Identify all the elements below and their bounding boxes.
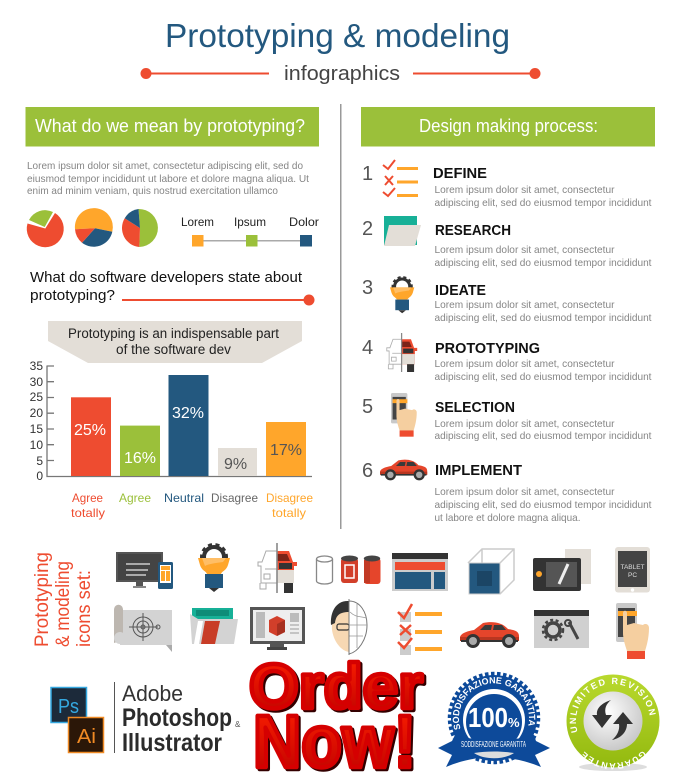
pie chart 1 — [27, 210, 64, 247]
icon: wire cube — [468, 549, 514, 594]
icon: tablet pc: PC — [628, 572, 637, 579]
satisfaction guarantee badge: SODDISFAZIONE GARANTITA — [452, 677, 536, 730]
step 2: research: RESEARCH — [435, 223, 511, 239]
step 4: prototyping: PROTOTYPING — [435, 341, 540, 357]
bar: disagree 9% — [218, 448, 257, 476]
category labels: totally — [272, 506, 306, 520]
category labels: totally — [71, 506, 105, 520]
y axis — [30, 359, 312, 483]
step 5: selection — [362, 393, 652, 442]
banner callout — [48, 321, 302, 363]
satisfaction guarantee badge: SODDISFAZIONE GARANTITA — [461, 740, 526, 749]
icon: textured cylinder — [341, 556, 358, 583]
step 5: selection: adipiscing elit, sed do eiusmod tempor incididunt — [434, 430, 652, 442]
bar: disagree totally 17%: 17% — [270, 442, 302, 459]
icon: checklist large — [398, 604, 442, 655]
pie legend: Ipsum — [234, 215, 266, 229]
category labels: Disagree — [266, 491, 313, 505]
step 6: implement: Lorem ipsum dolor sit amet, consectetur — [434, 486, 615, 498]
icon: graphics tablet — [533, 549, 591, 591]
icon: car — [380, 460, 427, 480]
y axis: 5 — [36, 454, 43, 468]
icon: phone touch large — [616, 603, 649, 659]
icon: light bulb large — [198, 544, 230, 592]
question heading: prototyping? — [30, 287, 115, 304]
step 5: selection: SELECTION — [435, 400, 515, 416]
icon: browser layout — [392, 553, 448, 591]
step 6: implement — [362, 460, 652, 524]
logos: photoshop and illustrator: Adobe — [122, 681, 183, 706]
category labels: Neutral — [164, 491, 204, 505]
icon: browser with tools — [534, 610, 589, 648]
step 5: selection: 5 — [362, 396, 373, 418]
intro text block: eiusmod tempor incididunt ut labore et dolore magna aliqua. Ut — [27, 173, 309, 185]
step 3: ideate: 3 — [362, 277, 373, 299]
icon: phone touch — [391, 393, 417, 437]
icon: photoshop: Ps — [58, 696, 79, 718]
icons set vertical label: Prototyping — [32, 552, 53, 647]
step 6: implement: 6 — [362, 460, 373, 482]
order now call to action: Order — [249, 652, 423, 722]
y axis: 15 — [30, 422, 43, 436]
intro text block — [27, 160, 309, 197]
icon: checklist — [383, 160, 418, 197]
icon: car large — [460, 622, 519, 648]
step 2: research: 2 — [362, 218, 373, 240]
icon: open folder — [190, 608, 238, 644]
category labels: Agree — [72, 491, 103, 505]
logos: photoshop and illustrator: & — [235, 720, 241, 729]
step 6: implement: IMPLEMENT — [435, 463, 522, 479]
icon: outline cylinder — [316, 556, 332, 584]
y axis: 10 — [30, 438, 43, 452]
order now call to action: Now! — [253, 700, 416, 783]
question heading — [30, 269, 314, 306]
category labels: Disagree — [211, 491, 258, 505]
step 4: prototyping: Lorem ipsum dolor sit amet, consectetur — [434, 358, 615, 370]
pie legend: Dolor — [289, 215, 319, 229]
icon: illustrator: Ai — [77, 726, 96, 748]
icon: illustrator — [68, 718, 104, 752]
icon: solid cylinder — [364, 556, 380, 584]
pie chart 3 — [122, 209, 158, 247]
panel: what do we mean by prototyping — [26, 107, 319, 520]
logos: photoshop and illustrator: Illustrator — [122, 729, 222, 757]
satisfaction guarantee badge: 100 — [468, 702, 508, 733]
step 1: define: Lorem ipsum dolor sit amet, consectetur — [434, 184, 615, 196]
unlimited revision badge: GUARANTEE — [582, 752, 646, 770]
icon: light bulb — [390, 277, 414, 313]
icons set vertical label — [32, 552, 95, 647]
step 3: ideate: adipiscing elit, sed do eiusmod tempor incididunt — [434, 312, 652, 324]
y axis: 25 — [30, 390, 43, 404]
step 3: ideate — [362, 277, 652, 324]
order now call to action — [249, 652, 423, 783]
unlimited revision badge — [566, 674, 660, 771]
step 1: define: 1 — [362, 163, 373, 185]
logos: photoshop and illustrator: Photoshop — [122, 704, 232, 732]
step 4: prototyping: 4 — [362, 337, 373, 359]
logos: photoshop and illustrator — [51, 681, 241, 757]
step 6: implement: ut labore et dolore magna aliqua. — [434, 512, 580, 524]
y axis: 35 — [30, 359, 43, 373]
icon: blueprint scroll — [114, 605, 172, 652]
icon: half wireframe car large — [258, 543, 297, 593]
icon: tablet pc: TABLET — [620, 564, 645, 571]
icon: monitor and phone — [116, 552, 173, 589]
question heading: What do software developers state about — [30, 269, 303, 286]
pie chart 2 — [75, 208, 113, 247]
step 3: ideate: IDEATE — [435, 283, 486, 299]
icon: tablet pc — [615, 547, 650, 592]
step 5: selection: Lorem ipsum dolor sit amet, consectetur — [434, 418, 615, 430]
icon: half wireframe car — [387, 333, 417, 372]
step 2: research: Lorem ipsum dolor sit amet, consectetur — [434, 244, 615, 256]
pie legend — [181, 215, 319, 246]
bar: disagree 9%: 9% — [224, 456, 247, 473]
bar: disagree totally 17% — [266, 422, 306, 476]
heading: left panel — [26, 107, 319, 146]
banner callout: of the software dev — [116, 342, 231, 357]
category labels — [71, 491, 313, 520]
heading: right panel: Design making process: — [419, 116, 598, 136]
panel: design making process — [361, 107, 655, 524]
step 4: prototyping: adipiscing elit, sed do eiusmod tempor incididunt — [434, 371, 652, 383]
icon: folder — [384, 216, 421, 246]
step 2: research — [362, 216, 652, 269]
bar chart — [30, 359, 313, 520]
bar: agree 16% — [120, 426, 160, 476]
category labels: Agree — [119, 491, 151, 505]
bar: neutral 32%: 32% — [172, 405, 204, 422]
heading: left panel: What do we mean by prototyping? — [35, 116, 305, 136]
step 1: define: adipiscing elit, sed do eiusmod tempor incididunt — [434, 197, 652, 209]
title: Prototyping & modeling — [165, 17, 510, 54]
intro text block: enim ad minim veniam, quis nostrud exercitation ullamco — [27, 185, 278, 197]
bar: agree 16%: 16% — [124, 450, 156, 467]
y axis: 30 — [30, 375, 43, 389]
unlimited revision badge: UNLIMITED REVISION — [570, 678, 656, 733]
bar: neutral 32% — [168, 375, 208, 476]
satisfaction guarantee badge: % — [508, 715, 520, 730]
y axis: 0 — [36, 469, 43, 483]
bar: agree totally 25%: 25% — [74, 422, 106, 439]
pie legend: Lorem — [181, 215, 214, 229]
icon: monitor with 3D cube — [250, 607, 305, 650]
bar: agree totally 25% — [71, 397, 111, 476]
intro text block: Lorem ipsum dolor sit amet, consectetur adipiscing elit, sed do — [27, 160, 303, 172]
icons set vertical label: icons set: — [74, 570, 95, 647]
subtitle with side rules: infographics — [284, 63, 400, 85]
heading: right panel — [361, 107, 655, 146]
step 1: define: DEFINE — [433, 166, 487, 182]
banner callout: Prototyping is an indispensable part — [68, 326, 279, 341]
step 6: implement: adipiscing elit, sed do eiusmod tempor incididunt — [434, 499, 652, 511]
y axis: 20 — [30, 406, 43, 420]
step 1: define — [362, 160, 652, 209]
step 2: research: adipiscing elit, sed do eiusmod tempor incididunt — [434, 257, 652, 269]
icon: photoshop — [51, 688, 86, 722]
icon: half wireframe face — [331, 599, 367, 655]
step 3: ideate: Lorem ipsum dolor sit amet, consectetur — [434, 299, 615, 311]
icons set vertical label: & modeling — [53, 561, 74, 647]
subtitle with side rules — [140, 63, 540, 85]
satisfaction guarantee badge — [438, 672, 550, 767]
step 4: prototyping — [362, 333, 652, 383]
